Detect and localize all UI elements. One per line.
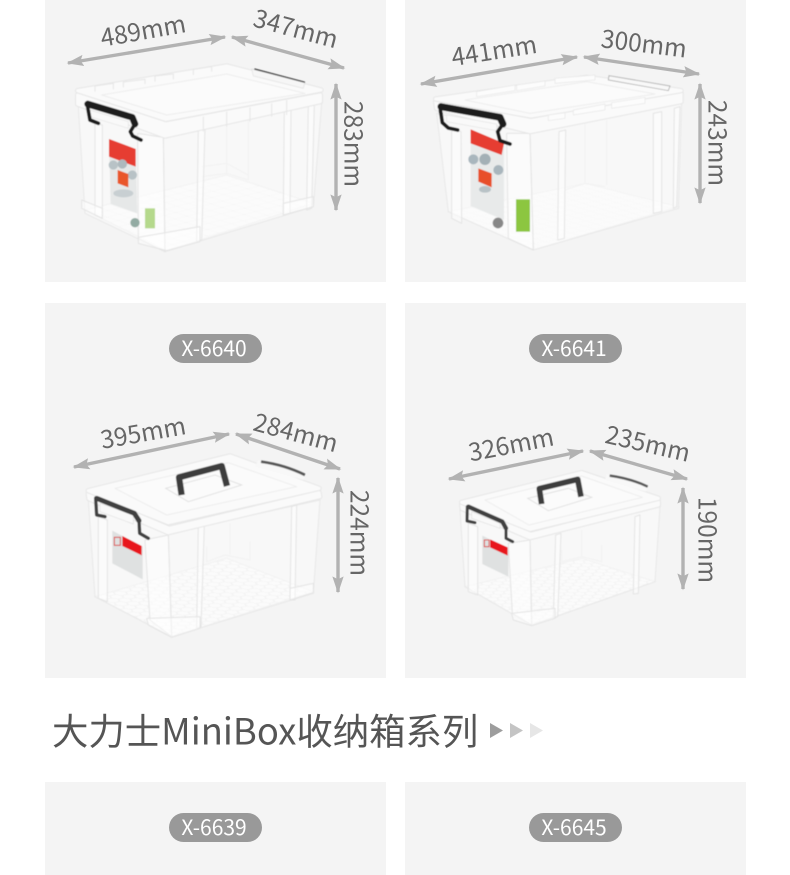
icon: far latch [605,474,648,492]
dimension: width 489mm [68,5,225,63]
dimension: width 395mm: 395mm [98,407,188,457]
panel: X-6639 [45,782,386,875]
icon: storage box, 441mm model [436,75,682,250]
dimension: height 224mm: 224mm [342,490,378,576]
icon: side latch handle [467,507,513,542]
icon: lid handle [166,466,242,502]
dimension: width 441mm: 441mm [449,26,539,74]
dimension: width 326mm [449,419,583,479]
icon: green recycle sticker [516,199,530,232]
panel: X-6645 [405,782,746,875]
product label [109,139,137,213]
dimension: height 283mm: 283mm [336,101,372,187]
icon: round sticker [130,218,140,227]
panel: top right [405,0,746,282]
dimension: width 326mm: 326mm [465,419,557,469]
dimension: depth 284mm: 284mm [250,404,342,460]
dimension: width 395mm [74,407,229,467]
icon: black latch handle [87,103,141,140]
title: 大力士MiniBox收纳箱系列 [52,704,478,756]
icon: far latch [255,460,307,480]
dimension: depth 235mm: 235mm [602,416,694,470]
icon: storage box, 326mm model [460,473,660,626]
panel: top left [45,0,386,282]
icon: far latch [252,69,305,88]
dimension: depth 347mm [232,0,344,68]
model tag X-6639: X-6639 [181,812,247,842]
dimension: width 489mm: 489mm [98,5,188,55]
model tag X-6641: X-6641 [541,333,607,363]
dimension: depth 300mm [584,20,699,74]
dimension: depth 347mm: 347mm [250,0,342,56]
product label [468,129,504,220]
dimension: width 441mm [421,26,577,84]
icon: lid handle [528,479,592,511]
icon: green recycle sticker [145,208,155,228]
dimension: height 283mm [336,84,372,210]
model tag X-6640: X-6640 [181,333,247,363]
model tag X-6645: X-6645 [541,812,607,842]
dimension: height 190mm: 190mm [690,497,726,583]
dimension: height 243mm: 243mm [700,100,736,186]
icon: storage box, 489mm model [78,66,322,252]
product label [112,531,143,579]
icon: round sticker [493,218,503,228]
icon: far latch [608,76,670,91]
product label [482,536,508,577]
icon: black latch handle [440,107,510,144]
panel: X-6640 [45,303,386,678]
panel: X-6641 [405,303,746,678]
icon: side latch handle [96,498,148,538]
icon: storage box, 395mm model [88,456,320,637]
dimension: height 224mm [338,478,378,592]
icon: triple arrows [490,723,543,738]
dimension: depth 300mm: 300mm [599,20,689,66]
